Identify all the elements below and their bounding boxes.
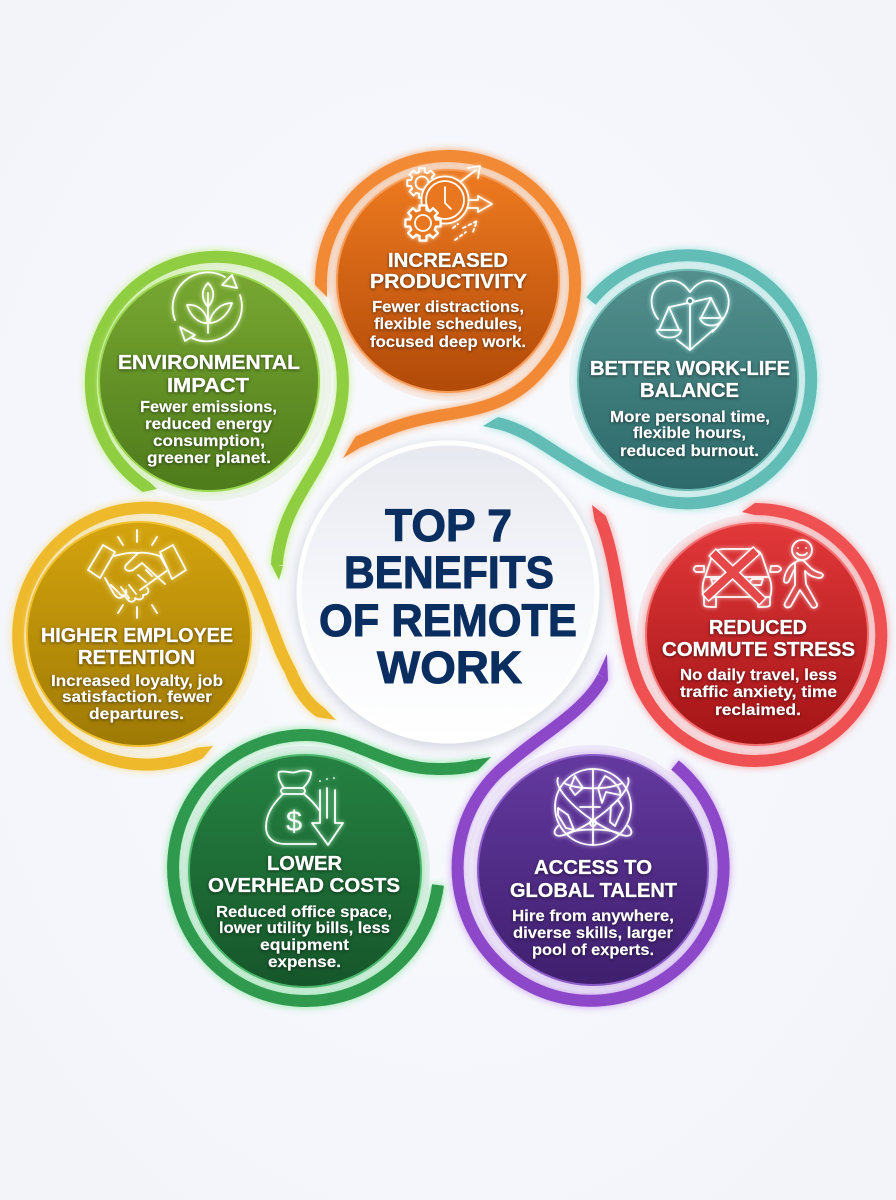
ribbon: dark green — [173, 735, 491, 1001]
title: WORK — [377, 642, 522, 693]
disc: purple — [478, 755, 708, 985]
text: reduced commute stress: No daily travel, less — [680, 667, 837, 684]
icon: crossed car and walking person — [694, 540, 823, 608]
text: environmental impact: greener planet. — [147, 450, 271, 467]
text: environmental impact — [118, 351, 300, 467]
text: lower overhead costs: expense. — [268, 954, 341, 971]
disc: yellow — [27, 522, 251, 746]
text: higher employee retention: Increased loyalty, job — [51, 673, 223, 690]
panel: higher employee retention — [18, 508, 336, 765]
icon: globe with orbits — [555, 769, 631, 845]
text: better work-life balance: BALANCE — [640, 379, 739, 402]
text: lower overhead costs: equipment — [260, 937, 349, 954]
text: better work-life balance: reduced burnout. — [620, 443, 759, 460]
text: access to global talent: ACCESS TO — [534, 856, 652, 879]
ribbon: teal — [483, 255, 811, 503]
text: environmental impact: IMPACT — [167, 374, 250, 397]
text: higher employee retention: satisfaction. fewer — [62, 689, 212, 706]
icon: money bag with down arrow — [266, 770, 343, 845]
text: increased productivity — [370, 249, 527, 351]
text: lower overhead costs — [208, 852, 400, 971]
title — [319, 500, 577, 693]
text: environmental impact: reduced energy — [145, 416, 272, 433]
text: better work-life balance: More personal time, — [610, 409, 770, 426]
text: higher employee retention: RETENTION — [78, 646, 195, 669]
center circle — [299, 443, 597, 741]
text: better work-life balance: flexible hours, — [633, 425, 746, 442]
text: lower overhead costs: lower utility bills, less — [219, 920, 390, 937]
icon: dollar sign: $ — [286, 806, 302, 838]
panel: increased productivity — [315, 156, 575, 458]
text: increased productivity: INCREASED — [388, 249, 508, 272]
icon: handshake with rays — [88, 530, 186, 618]
text: reduced commute stress — [662, 616, 855, 719]
ribbon: yellow — [18, 508, 336, 765]
text: reduced commute stress: traffic anxiety, time — [680, 684, 837, 701]
text: lower overhead costs: OVERHEAD COSTS — [208, 874, 400, 897]
disc: dark green — [189, 755, 421, 987]
text: better work-life balance — [590, 357, 790, 460]
panel: better work-life balance — [483, 255, 811, 503]
ribbon: orange — [315, 156, 575, 458]
text: environmental impact: Fewer emissions, — [140, 399, 277, 416]
disc: red — [646, 523, 868, 745]
ribbon: red — [592, 503, 881, 761]
text: increased productivity: Fewer distractions, — [372, 299, 524, 316]
icon: clock with gears and arrows — [405, 166, 492, 241]
disc: teal — [578, 270, 798, 490]
text: increased productivity: flexible schedules, — [374, 316, 522, 333]
disc: light green — [99, 271, 319, 491]
text: lower overhead costs: Reduced office space, — [216, 904, 392, 921]
text: environmental impact: ENVIRONMENTAL — [118, 351, 300, 374]
text: reduced commute stress: reclaimed. — [715, 702, 801, 719]
title: TOP 7 — [385, 500, 512, 551]
panel: lower overhead costs — [173, 735, 491, 1001]
title: BENEFITS — [344, 547, 554, 598]
text: lower overhead costs: LOWER — [267, 852, 342, 875]
text: access to global talent — [510, 856, 677, 959]
text: increased productivity: PRODUCTIVITY — [370, 270, 527, 293]
text: environmental impact: consumption, — [153, 433, 265, 450]
panel: access to global talent — [458, 654, 724, 1001]
ribbon: light green — [91, 257, 343, 580]
text: better work-life balance: BETTER WORK-LIFE — [590, 357, 790, 380]
icon: recycling arrows around plant — [173, 272, 242, 341]
panel: reduced commute stress — [592, 503, 881, 761]
text: access to global talent: Hire from anywhere, — [512, 908, 674, 925]
text: increased productivity: focused deep work. — [370, 334, 526, 351]
text: higher employee retention: departures. — [89, 706, 184, 723]
icon: heart with scales — [652, 281, 729, 350]
text: reduced commute stress: REDUCED — [709, 616, 807, 639]
text: higher employee retention: HIGHER EMPLOYEE — [41, 624, 233, 647]
panel: environmental impact — [91, 257, 343, 580]
text: access to global talent: diverse skills, larger — [513, 925, 673, 942]
ribbon: purple — [458, 654, 724, 1001]
disc: center — [299, 443, 597, 741]
disc: orange — [337, 170, 559, 392]
title: OF REMOTE — [319, 595, 577, 646]
text: higher employee retention — [41, 624, 233, 723]
text: access to global talent: GLOBAL TALENT — [510, 879, 677, 902]
text: reduced commute stress: COMMUTE STRESS — [662, 638, 855, 661]
text: access to global talent: pool of experts. — [532, 942, 654, 959]
